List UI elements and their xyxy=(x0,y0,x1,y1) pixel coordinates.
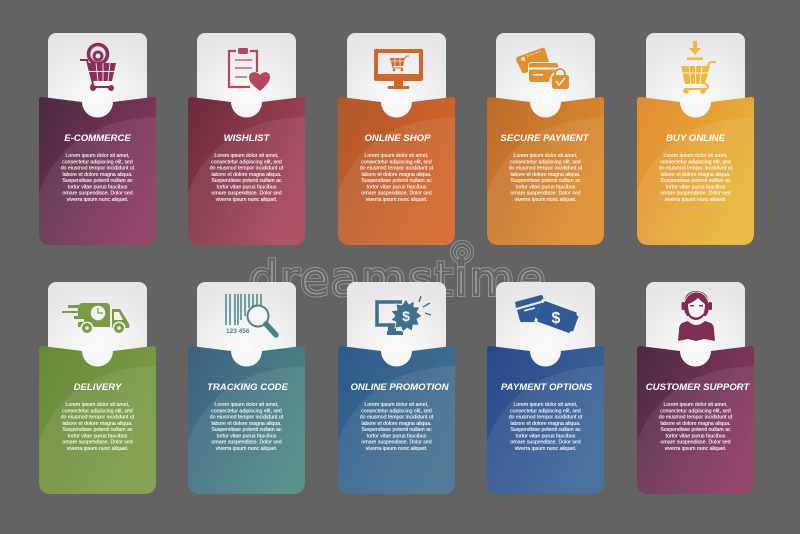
body text: Lorem ipsum dolor sit amet, xyxy=(364,402,429,408)
icon: shopping cart with at sign xyxy=(80,44,116,91)
pocket xyxy=(637,97,754,245)
body text: Suspendisse potenti nullam ac xyxy=(62,427,133,433)
pocket xyxy=(188,346,305,494)
icon: clipboard with heart xyxy=(229,48,270,91)
pocket xyxy=(637,346,754,494)
body text: Lorem ipsum dolor sit amet, xyxy=(65,402,130,408)
panel: secure payment xyxy=(487,33,604,245)
body text: ornare suspendisse. Dolor sed xyxy=(510,190,581,196)
body text: Lorem ipsum dolor sit amet, xyxy=(214,153,279,159)
panel: delivery xyxy=(39,282,156,494)
body text: labore et dolore magna aliqua. xyxy=(361,421,432,427)
body text: ornare suspendisse. Dolor sed xyxy=(62,440,133,446)
body text: viverra ipsum nunc aliquet. xyxy=(216,446,277,452)
body text: viverra ipsum nunc aliquet. xyxy=(665,446,726,452)
body text: do eiusmod tempor incididunt ut xyxy=(360,414,434,420)
white tab xyxy=(197,33,296,121)
heading: SECURE PAYMENT xyxy=(500,133,590,144)
body text: consectetur adipiscing elit, sed xyxy=(510,159,581,165)
body text: tortor vitae purus faucibus xyxy=(217,433,277,439)
panel: tracking code xyxy=(188,282,305,494)
body text: consectetur adipiscing elit, sed xyxy=(211,408,282,414)
icon: arrow into cart xyxy=(681,41,716,94)
heading: ONLINE SHOP xyxy=(364,133,431,144)
heading: DELIVERY xyxy=(74,382,123,393)
heading: BUY ONLINE xyxy=(666,133,726,144)
body text: viverra ipsum nunc aliquet. xyxy=(67,446,128,452)
heading: ONLINE PROMOTION xyxy=(350,382,450,393)
body text: ornare suspendisse. Dolor sed xyxy=(660,190,731,196)
body text: Suspendisse potenti nullam ac xyxy=(211,427,282,433)
body text: tortor vitae purus faucibus xyxy=(666,184,726,190)
heading: TRACKING CODE xyxy=(207,382,289,393)
body text: labore et dolore magna aliqua. xyxy=(211,172,282,178)
icon: barcode with magnifier xyxy=(226,294,276,335)
pocket xyxy=(39,97,156,245)
body text: tortor vitae purus faucibus xyxy=(666,433,726,439)
pocket xyxy=(338,346,455,494)
body text: ornare suspendisse. Dolor sed xyxy=(211,440,282,446)
body text: labore et dolore magna aliqua. xyxy=(660,421,731,427)
white tab xyxy=(496,282,595,370)
body text: Suspendisse potenti nullam ac xyxy=(361,427,432,433)
sheen xyxy=(39,366,156,494)
icon: delivery truck xyxy=(62,303,129,334)
sheen xyxy=(487,117,604,245)
body text: consectetur adipiscing elit, sed xyxy=(361,159,432,165)
sheen xyxy=(338,117,455,245)
panel: customer support xyxy=(637,282,754,494)
body text: labore et dolore magna aliqua. xyxy=(510,421,581,427)
heading: PAYMENT OPTIONS xyxy=(501,382,593,393)
watermark: dreamstime xyxy=(249,252,545,306)
body text: consectetur adipiscing elit, sed xyxy=(62,159,133,165)
body text: viverra ipsum nunc aliquet. xyxy=(216,197,277,203)
body text: do eiusmod tempor incididunt ut xyxy=(61,414,135,420)
body text: ornare suspendisse. Dolor sed xyxy=(361,440,432,446)
panel: payment options xyxy=(487,282,604,494)
body text: tortor vitae purus faucibus xyxy=(68,433,128,439)
body text: consectetur adipiscing elit, sed xyxy=(361,408,432,414)
body text: viverra ipsum nunc aliquet. xyxy=(515,197,576,203)
heading: CUSTOMER SUPPORT xyxy=(646,382,750,393)
body text: Lorem ipsum dolor sit amet, xyxy=(663,402,728,408)
sheen xyxy=(188,366,305,494)
white tab xyxy=(496,33,595,121)
icon: support agent with headset xyxy=(678,291,715,341)
body text: do eiusmod tempor incididunt ut xyxy=(659,414,733,420)
pocket xyxy=(188,97,305,245)
body text: ornare suspendisse. Dolor sed xyxy=(211,190,282,196)
body text: do eiusmod tempor incididunt ut xyxy=(210,166,284,172)
body text: ornare suspendisse. Dolor sed xyxy=(62,190,133,196)
white tab xyxy=(48,33,147,121)
body text: Suspendisse potenti nullam ac xyxy=(211,178,282,184)
icon: barcode with magnifier: 123 456 xyxy=(226,328,250,335)
body text: do eiusmod tempor incididunt ut xyxy=(659,166,733,172)
body text: viverra ipsum nunc aliquet. xyxy=(67,197,128,203)
body text: tortor vitae purus faucibus xyxy=(516,433,576,439)
body text: Lorem ipsum dolor sit amet, xyxy=(513,153,578,159)
panel: wishlist xyxy=(188,33,305,245)
icon: monitor with cart xyxy=(374,49,423,89)
body text: Suspendisse potenti nullam ac xyxy=(510,427,581,433)
heading: E-COMMERCE xyxy=(64,133,131,144)
body text: Lorem ipsum dolor sit amet, xyxy=(364,153,429,159)
body text: Suspendisse potenti nullam ac xyxy=(660,427,731,433)
body text: viverra ipsum nunc aliquet. xyxy=(665,197,726,203)
body text: tortor vitae purus faucibus xyxy=(367,184,427,190)
body text: labore et dolore magna aliqua. xyxy=(62,421,133,427)
icon: card and banknote: $ xyxy=(552,310,561,327)
body text: consectetur adipiscing elit, sed xyxy=(62,408,133,414)
body text: Suspendisse potenti nullam ac xyxy=(510,178,581,184)
body text: Lorem ipsum dolor sit amet, xyxy=(513,402,578,408)
icon: card and banknote xyxy=(515,295,580,335)
body text: viverra ipsum nunc aliquet. xyxy=(366,197,427,203)
panel: online shop xyxy=(338,33,455,245)
white tab xyxy=(48,282,147,370)
body text: labore et dolore magna aliqua. xyxy=(660,172,731,178)
body text: Suspendisse potenti nullam ac xyxy=(62,178,133,184)
sheen xyxy=(637,366,754,494)
body text: consectetur adipiscing elit, sed xyxy=(211,159,282,165)
body text: do eiusmod tempor incididunt ut xyxy=(360,166,434,172)
body text: viverra ipsum nunc aliquet. xyxy=(366,446,427,452)
body text: tortor vitae purus faucibus xyxy=(516,184,576,190)
panel: online promotion xyxy=(338,282,455,494)
body text: labore et dolore magna aliqua. xyxy=(510,172,581,178)
body text: viverra ipsum nunc aliquet. xyxy=(515,446,576,452)
panel: buy online xyxy=(637,33,754,245)
white tab xyxy=(347,33,446,121)
pocket xyxy=(487,97,604,245)
body text: Lorem ipsum dolor sit amet, xyxy=(65,153,130,159)
white tab xyxy=(197,282,296,370)
body text: do eiusmod tempor incididunt ut xyxy=(509,166,583,172)
body text: consectetur adipiscing elit, sed xyxy=(510,408,581,414)
sheen xyxy=(637,117,754,245)
icon: credit cards with lock xyxy=(516,48,570,92)
body text: Lorem ipsum dolor sit amet, xyxy=(214,402,279,408)
body text: Lorem ipsum dolor sit amet, xyxy=(663,153,728,159)
sheen xyxy=(487,366,604,494)
white tab xyxy=(347,282,446,370)
pocket xyxy=(39,346,156,494)
sheen xyxy=(39,117,156,245)
icon: monitor with dollar burst: $ xyxy=(402,308,410,324)
body text: tortor vitae purus faucibus xyxy=(68,184,128,190)
body text: labore et dolore magna aliqua. xyxy=(62,172,133,178)
body text: labore et dolore magna aliqua. xyxy=(211,421,282,427)
watermark: dreamstime xyxy=(249,252,545,306)
body text: ornare suspendisse. Dolor sed xyxy=(660,440,731,446)
body text: consectetur adipiscing elit, sed xyxy=(660,159,731,165)
pocket xyxy=(338,97,455,245)
white tab xyxy=(646,282,745,370)
body text: labore et dolore magna aliqua. xyxy=(361,172,432,178)
sheen xyxy=(188,117,305,245)
sheen xyxy=(338,366,455,494)
body text: ornare suspendisse. Dolor sed xyxy=(361,190,432,196)
body text: do eiusmod tempor incididunt ut xyxy=(509,414,583,420)
body text: tortor vitae purus faucibus xyxy=(367,433,427,439)
body text: do eiusmod tempor incididunt ut xyxy=(210,414,284,420)
body text: consectetur adipiscing elit, sed xyxy=(660,408,731,414)
body text: Suspendisse potenti nullam ac xyxy=(361,178,432,184)
body text: Suspendisse potenti nullam ac xyxy=(660,178,731,184)
panel: e-commerce xyxy=(39,33,156,245)
heading: WISHLIST xyxy=(224,133,271,144)
body text: do eiusmod tempor incididunt ut xyxy=(61,166,135,172)
body text: ornare suspendisse. Dolor sed xyxy=(510,440,581,446)
pocket xyxy=(487,346,604,494)
icon: monitor with dollar burst xyxy=(377,296,431,335)
body text: tortor vitae purus faucibus xyxy=(217,184,277,190)
white tab xyxy=(646,33,745,121)
